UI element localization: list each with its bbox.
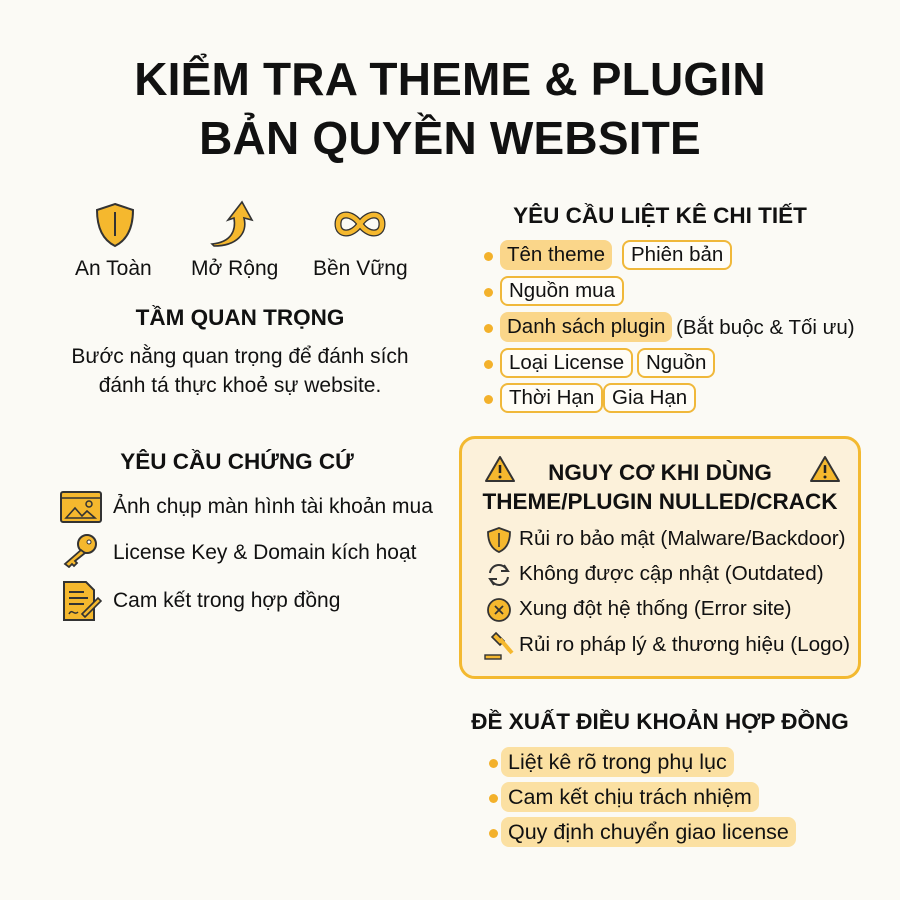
panel: risks — [459, 436, 861, 679]
list: contract terms: Quy định chuyển giao license — [508, 820, 789, 844]
icon row: Mở Rộng — [191, 257, 278, 280]
labels: An Toàn — [75, 257, 152, 280]
list: details: (Bắt buộc & Tối ưu) — [676, 316, 855, 339]
list: contract terms: Cam kết chịu trách nhiệm — [508, 785, 752, 809]
list: evidence — [60, 491, 433, 621]
icon: image — [60, 491, 102, 523]
list: contract terms: Liệt kê rõ trong phụ lục — [508, 750, 727, 774]
heading: risks: THEME/PLUGIN NULLED/CRACK — [482, 489, 838, 514]
list: details: Gia Hạn — [612, 386, 687, 409]
icon: contract — [63, 581, 102, 621]
title: KIỂM TRA THEME & PLUGIN — [134, 53, 766, 105]
icon: warning left — [485, 456, 515, 482]
text: importance: đánh tá thực khoẻ sự website. — [99, 374, 381, 397]
list: details: Nguồn — [646, 351, 706, 374]
icon: infinity — [334, 212, 386, 236]
icon row — [75, 200, 408, 280]
list: details: Phiên bản — [631, 243, 723, 266]
list: details: Danh sách plugin — [507, 315, 665, 338]
list: details: Thời Hạn — [509, 386, 594, 409]
list: contract terms — [489, 747, 796, 847]
panel: risks: Rủi ro bảo mật (Malware/Backdoor) — [519, 527, 846, 550]
heading: evidence: YÊU CẦU CHỨNG CỨ — [120, 449, 354, 474]
panel: risks: Không được cập nhật (Outdated) — [519, 562, 824, 585]
icon: refresh — [488, 564, 510, 586]
list: evidence: Cam kết trong hợp đồng — [113, 589, 340, 612]
panel: risks: Xung đột hệ thống (Error site) — [519, 597, 792, 620]
heading: risks: NGUY CƠ KHI DÙNG — [548, 460, 772, 485]
icon: shield small — [487, 527, 511, 553]
icon: x circle — [487, 598, 511, 622]
title — [134, 53, 766, 164]
title: BẢN QUYỀN WEBSITE — [199, 112, 701, 164]
heading: importance: TẦM QUAN TRỌNG — [136, 305, 344, 330]
list: details: Tên theme — [507, 243, 605, 266]
icon: key — [64, 534, 97, 568]
list: details — [484, 240, 855, 413]
icon: arrow up — [210, 200, 254, 247]
list: details: Nguồn mua — [509, 279, 615, 302]
list: evidence: Ảnh chụp màn hình tài khoản mua — [113, 495, 433, 518]
icon row: Bền Vững — [313, 257, 408, 280]
list: details: Loại License — [509, 351, 624, 374]
text: importance — [71, 344, 409, 397]
heading: contract terms: ĐỀ XUẤT ĐIỀU KHOẢN HỢP ĐỒNG — [471, 709, 849, 734]
list: evidence: License Key & Domain kích hoạt — [113, 541, 416, 564]
text: importance: Bước nằng quan trọng để đánh sích — [71, 345, 409, 368]
icon: shield — [96, 203, 134, 248]
icon: gavel — [484, 632, 514, 660]
heading: detail list: YÊU CẦU LIỆT KÊ CHI TIẾT — [513, 203, 807, 228]
heading: risks — [482, 460, 838, 514]
panel: risks: Rủi ro pháp lý & thương hiệu (Logo) — [519, 633, 850, 656]
icon: warning right — [810, 456, 840, 482]
